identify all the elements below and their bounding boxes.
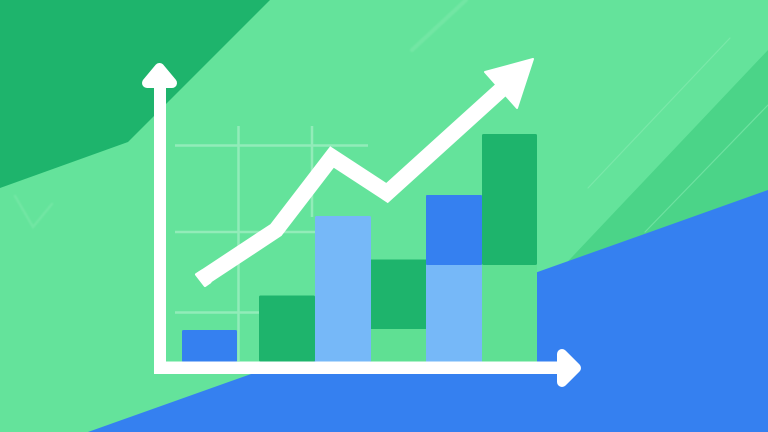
trend line arrow [196,59,533,286]
blue ground shape [88,190,768,432]
bar 1 blue [182,330,237,362]
bar 2 green [259,296,315,362]
bar 5 stacked [426,195,482,362]
bar chart [182,134,537,362]
bar 4 stacked [371,260,426,362]
axes [147,68,576,382]
dark green corner shape [0,0,270,188]
mid green right band [555,50,768,275]
grid lines [175,126,368,361]
vertical axis arrow [147,68,172,374]
horizontal axis arrow [154,354,576,382]
bar 3 light blue [315,216,371,362]
faint diagonal accents [15,0,768,232]
bar 6 stacked [482,134,537,362]
